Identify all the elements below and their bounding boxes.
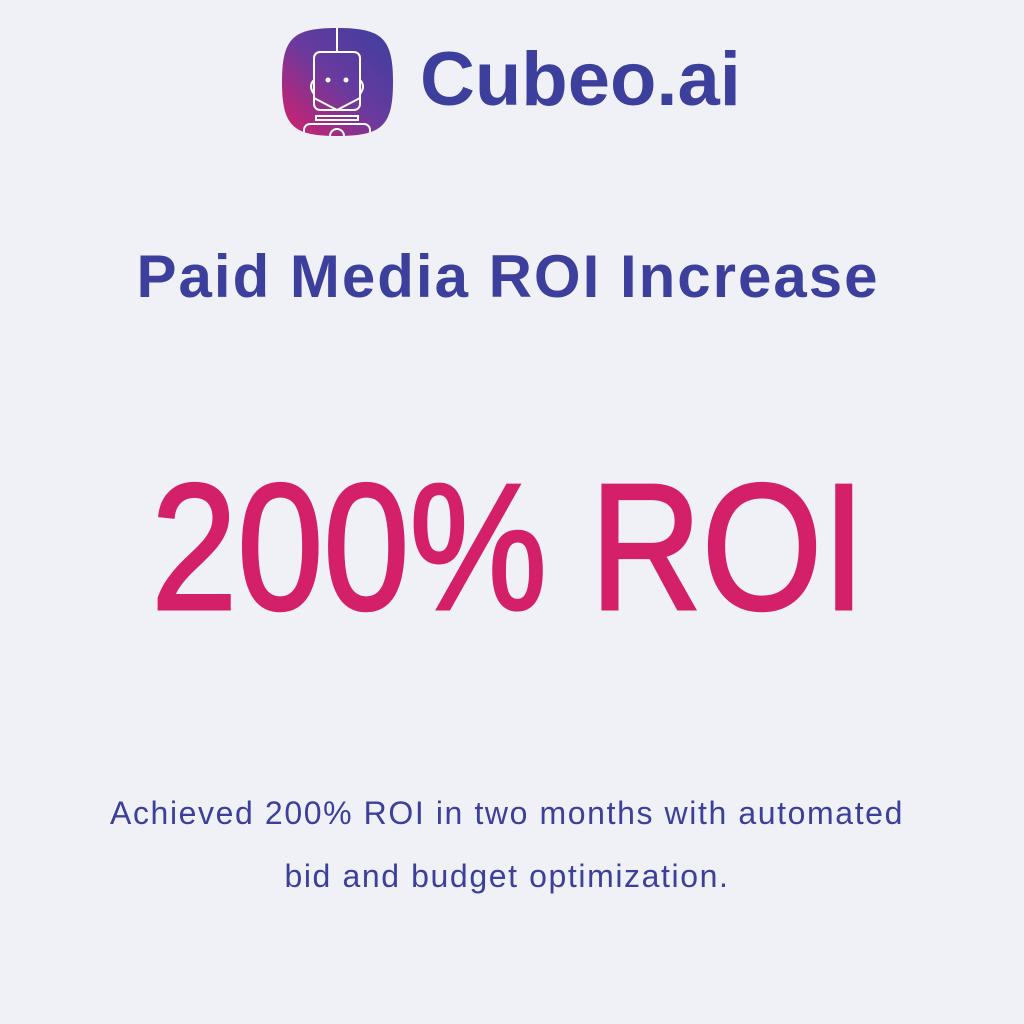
description: Achieved 200% ROI in two months with automated <box>110 795 904 831</box>
big stat: 200% ROI <box>151 447 865 648</box>
brand name: Cubeo.ai <box>420 37 741 122</box>
heading: Paid Media ROI Increase <box>137 243 879 310</box>
logo icon <box>282 28 393 136</box>
description: bid and budget optimization. <box>284 858 730 894</box>
description <box>110 795 904 894</box>
